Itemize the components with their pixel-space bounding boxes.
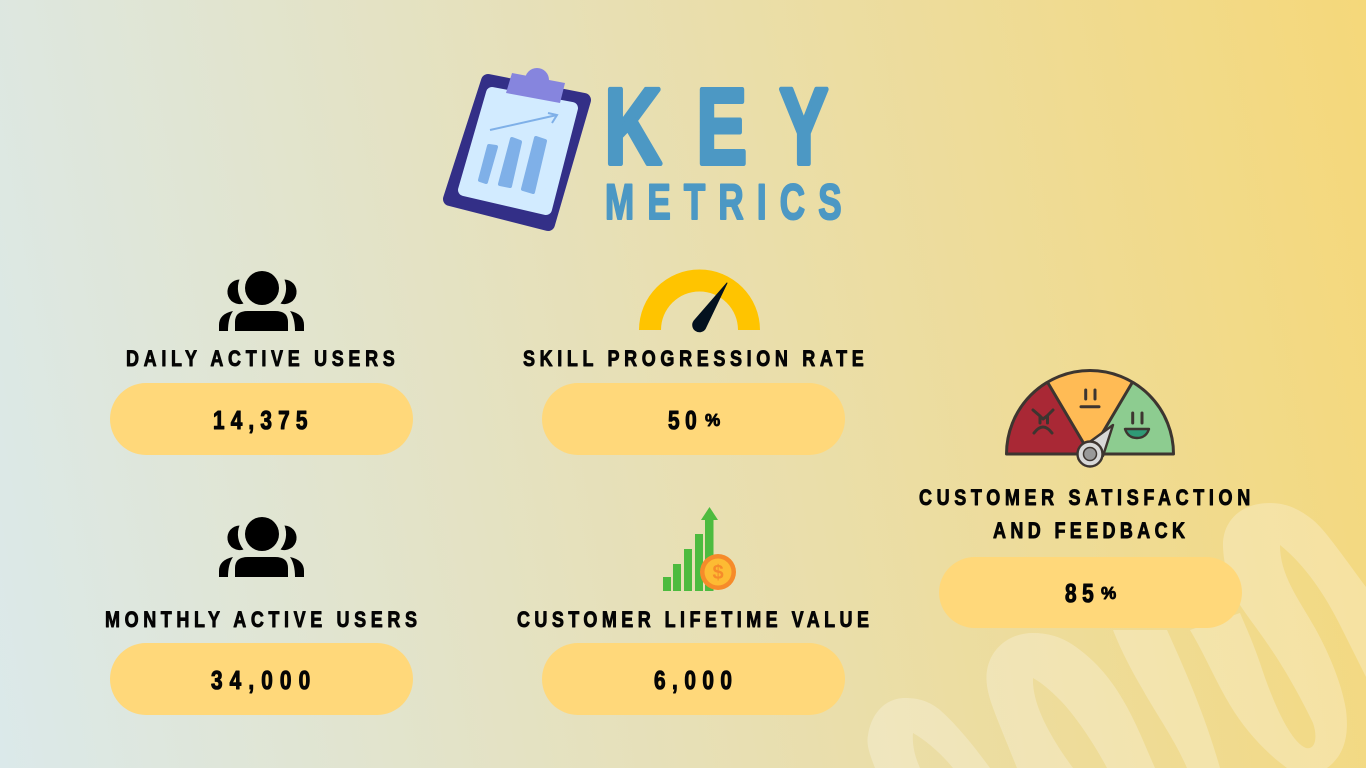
icon: speedometer	[639, 269, 760, 332]
value pill	[939, 557, 1242, 628]
heading: METRICS: METRICS	[605, 175, 842, 231]
label: MONTHLY ACTIVE USERS	[105, 608, 417, 633]
heading: KEY: Y	[780, 66, 828, 187]
panel: customer satisfaction and feedback	[919, 371, 1250, 628]
heading: KEY	[604, 66, 828, 187]
background squiggle	[867, 503, 1366, 768]
icon: users	[219, 271, 304, 331]
value pill	[110, 383, 413, 455]
heading: KEY: K	[604, 66, 661, 187]
label: SKILL PROGRESSION RATE	[523, 347, 864, 372]
value pill: 34,000	[211, 666, 310, 695]
value pill	[110, 643, 413, 715]
icon: growth bars and coin: $	[712, 562, 724, 584]
value pill: %	[1101, 583, 1117, 603]
label: CUSTOMER SATISFACTION	[919, 486, 1250, 511]
panel: skill progression rate	[523, 269, 864, 455]
value pill: 85	[1065, 579, 1099, 608]
panel: daily active users	[110, 271, 413, 455]
title block	[450, 66, 842, 231]
value pill	[542, 643, 845, 715]
label: DAILY ACTIVE USERS	[126, 347, 395, 372]
icon: satisfaction gauge with faces	[1006, 371, 1174, 466]
value pill: %	[705, 410, 721, 430]
panel: monthly active users	[105, 517, 417, 715]
value pill: 6,000	[654, 666, 732, 695]
panel: customer lifetime value	[517, 507, 869, 715]
heading: KEY: E	[696, 66, 747, 187]
icon: clipboard with chart	[450, 68, 584, 224]
icon: users	[219, 517, 304, 577]
label: CUSTOMER LIFETIME VALUE	[517, 608, 869, 633]
value pill	[542, 383, 845, 455]
value pill: 14,375	[213, 406, 307, 435]
label	[919, 486, 1250, 544]
value pill: 50	[668, 406, 702, 435]
label: AND FEEDBACK	[993, 519, 1185, 544]
icon: growth bars and coin	[663, 507, 736, 591]
